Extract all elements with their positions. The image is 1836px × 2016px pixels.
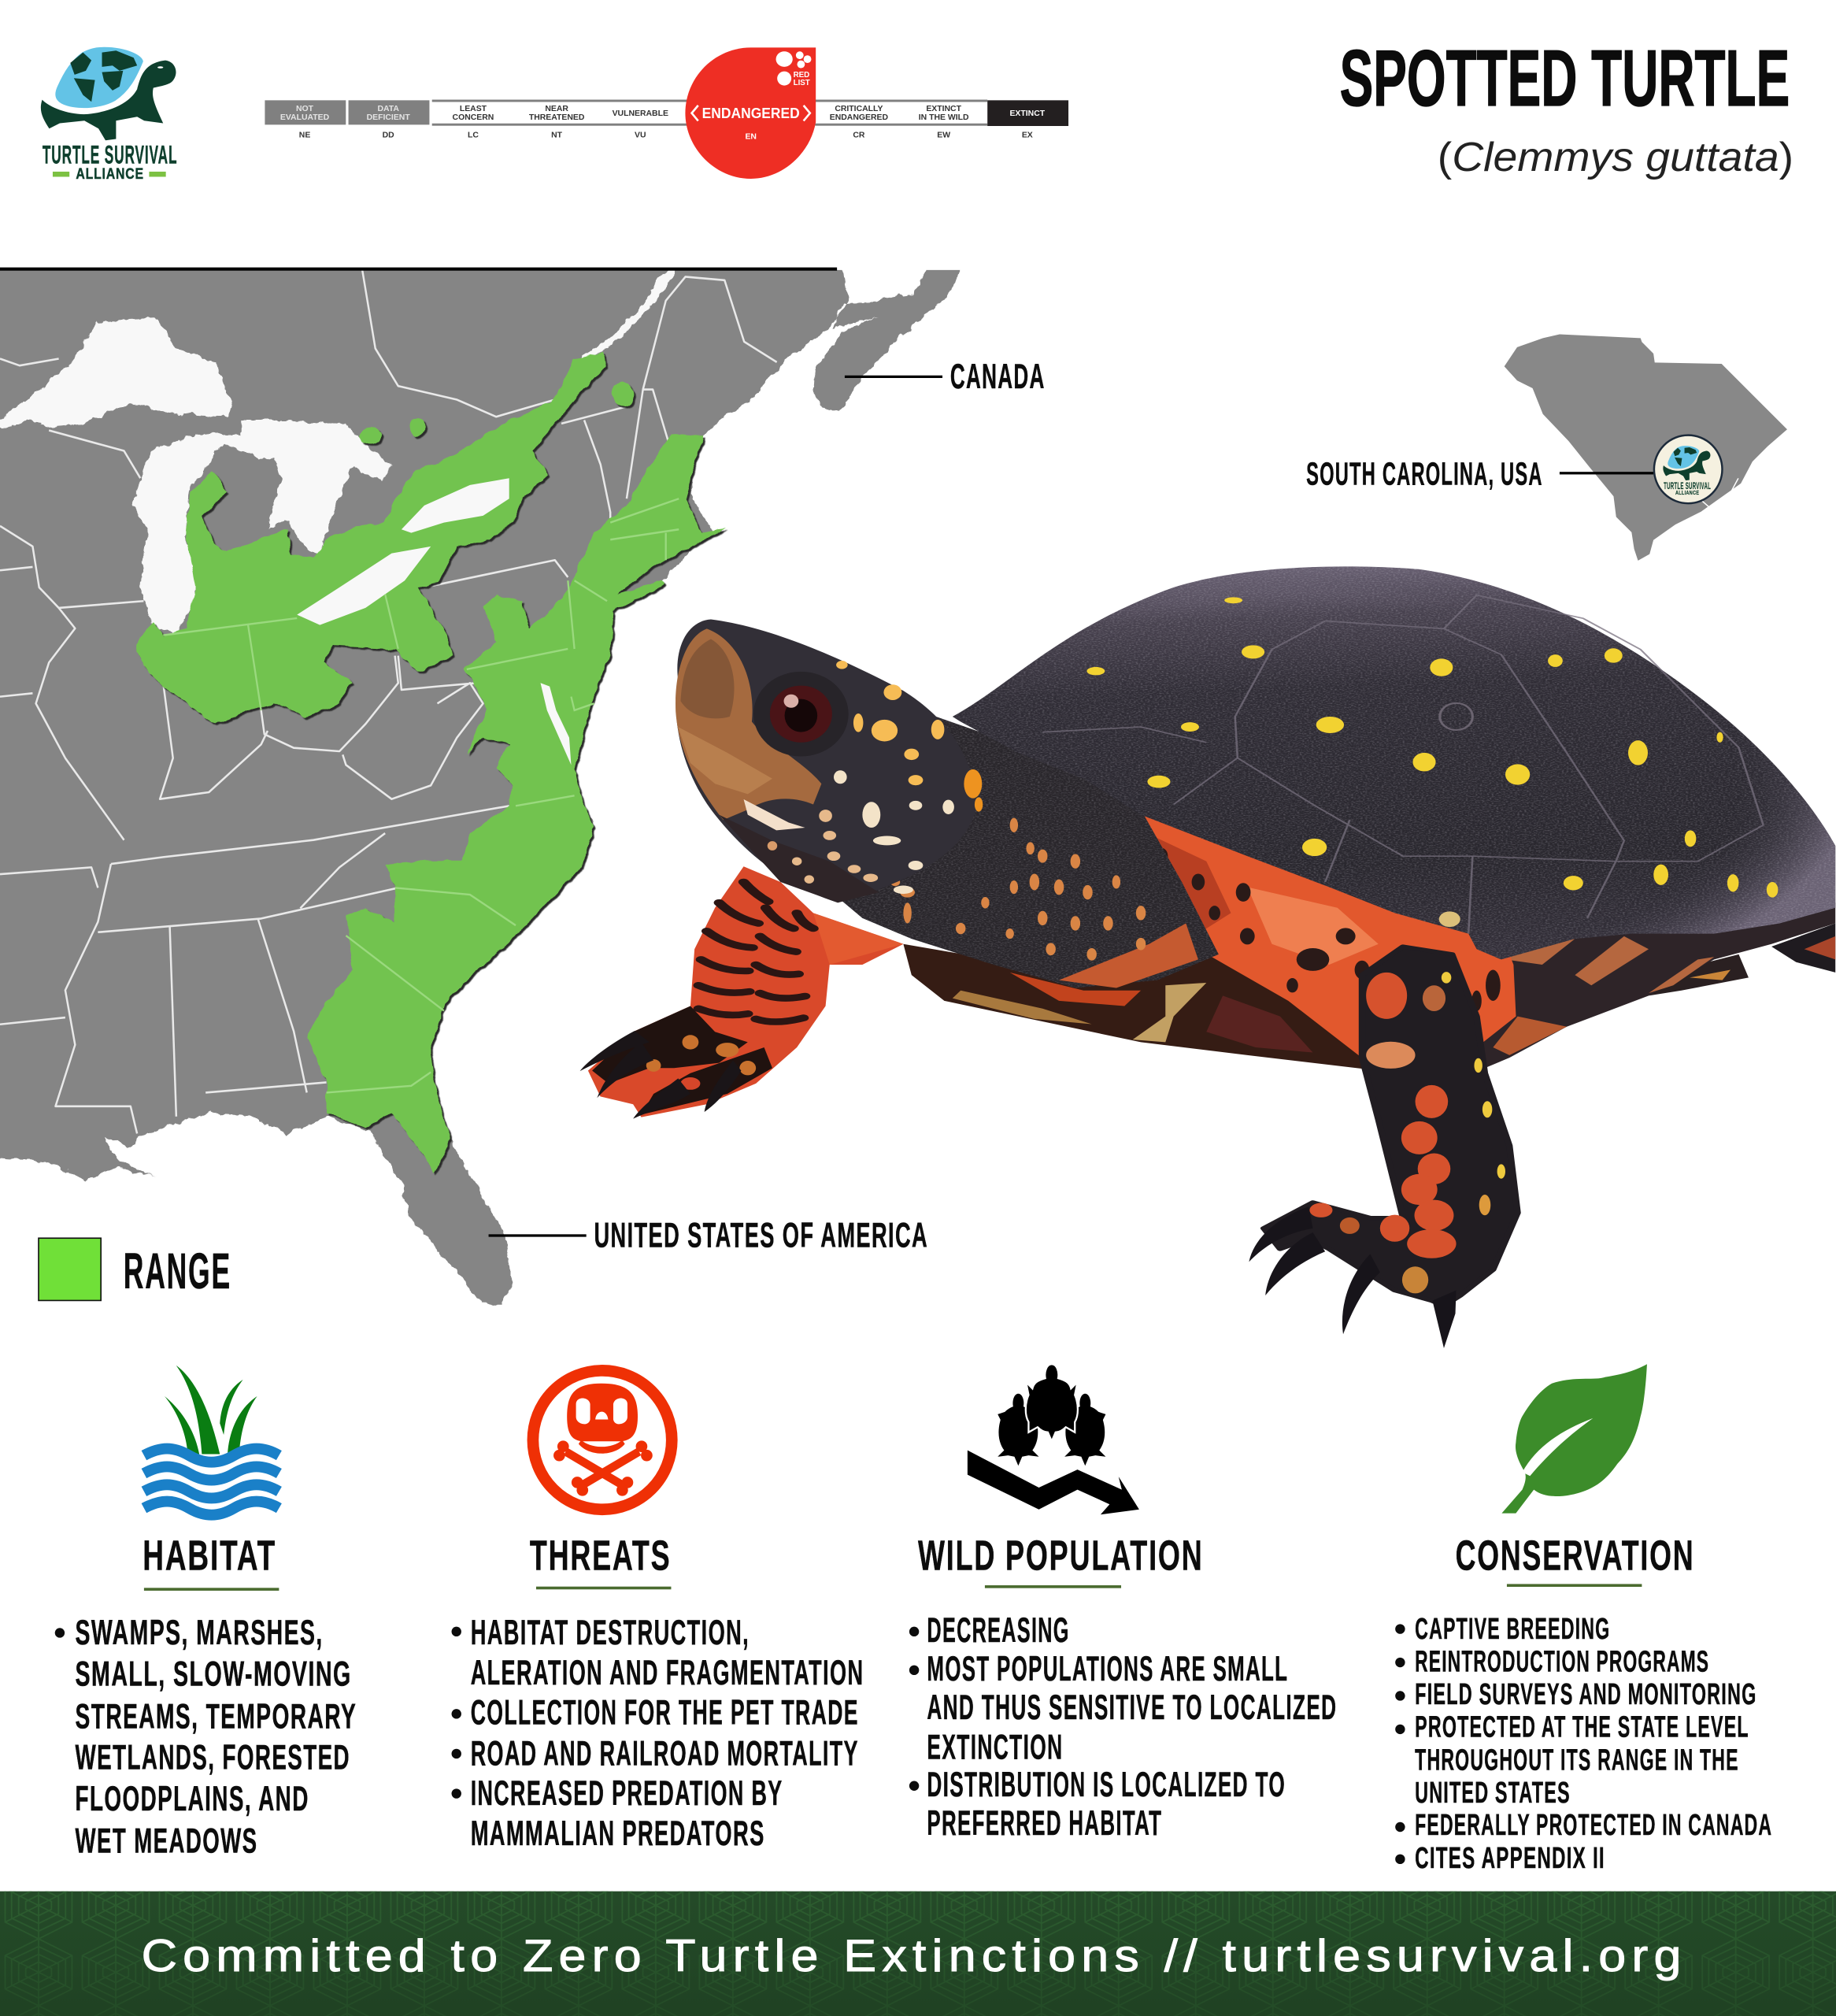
illustration: spotted turtle: [579, 566, 1835, 1348]
left front leg: [579, 866, 903, 1119]
label: Canada: CANADA: [950, 358, 1046, 396]
IUCN red list status bar: NEAR: [545, 105, 568, 113]
IUCN red list status bar: DD: [383, 132, 394, 140]
panel: wild population: [909, 1364, 1337, 1843]
head: [676, 620, 983, 902]
list: habitat: WETLANDS, FORESTED: [76, 1739, 350, 1777]
list: threats: [452, 1614, 864, 1853]
logo: Turtle Survival Alliance: ALLIANCE: [76, 165, 144, 183]
IUCN red list status bar: EXTINCT: [926, 105, 962, 113]
IUCN red list status bar: CRITICALLY: [835, 105, 883, 113]
St Lawrence river and Great Lakes: [0, 270, 676, 636]
icon: turtles and declining arrow: [968, 1364, 1139, 1514]
tail and rear leg: [1649, 923, 1835, 995]
black top rule: [0, 268, 837, 271]
IUCN red list status bar: EVALUATED: [280, 113, 330, 122]
icon: skull and crossbones: [533, 1370, 672, 1510]
IUCN red list status bar: CONCERN: [453, 113, 494, 122]
legend: range: RANGE: [124, 1243, 231, 1299]
IUCN red list status bar: LEAST: [460, 105, 487, 113]
heading: threats: THREATS: [530, 1532, 671, 1579]
IUCN red list status bar: DEFICIENT: [367, 113, 410, 122]
list: wild population: PREFERRED HABITAT: [927, 1804, 1162, 1843]
list: wild population: EXTINCTION: [927, 1728, 1064, 1766]
list: wild population: DECREASING: [927, 1611, 1070, 1650]
list: threats: HABITAT DESTRUCTION,: [471, 1614, 750, 1652]
range borders: [163, 498, 679, 1092]
species range: [135, 352, 724, 1174]
list: conservation: CITES APPENDIX II: [1415, 1841, 1605, 1874]
inset: South Carolina locator: [1306, 334, 1787, 561]
IUCN red list status bar: NT: [551, 132, 563, 140]
icon: grass and water: [144, 1366, 279, 1515]
IUCN red list status bar: RED: [794, 71, 809, 80]
list: threats: MAMMALIAN PREDATORS: [471, 1814, 765, 1853]
icon: leaf: [1501, 1364, 1647, 1514]
list: habitat: FLOODPLAINS, AND: [76, 1780, 309, 1818]
list: wild population: AND THUS SENSITIVE TO LOCALIZED: [927, 1688, 1337, 1727]
IUCN red list status bar: EX: [1022, 132, 1033, 140]
panel: threats: [452, 1370, 864, 1853]
badge: alliance logo: TURTLE SURVIVAL: [1664, 481, 1711, 491]
label: United States of America: [489, 1217, 928, 1255]
list: wild population: [909, 1611, 1337, 1843]
right front leg: [1249, 947, 1518, 1348]
list: wild population: MOST POPULATIONS ARE SMALL: [927, 1650, 1288, 1688]
list: habitat: WET MEADOWS: [76, 1822, 257, 1861]
label: United States of America: UNITED STATES OF AMERICA: [594, 1217, 928, 1255]
list: threats: INCREASED PREDATION BY: [471, 1774, 783, 1813]
scientific name: (Clemmys guttata ): [1438, 135, 1793, 180]
lower shell and bridge: [1452, 902, 1835, 1068]
inset: South Carolina locator: SOUTH CAROLINA, USA: [1306, 456, 1543, 492]
list: habitat: SWAMPS, MARSHES,: [76, 1614, 324, 1652]
plastron: [903, 944, 1379, 1071]
IUCN red list status bar: THREATENED: [529, 113, 585, 122]
IUCN red list status bar: EW: [937, 132, 950, 140]
logo: Turtle Survival Alliance: [41, 46, 177, 183]
list: wild population: DISTRIBUTION IS LOCALIZED TO: [927, 1766, 1286, 1804]
panel: conservation: [1395, 1364, 1772, 1874]
IUCN red list status bar: ENDANGERED: [830, 113, 888, 122]
list: habitat: SMALL, SLOW-MOVING: [76, 1655, 352, 1693]
orange body skin: [1116, 779, 1516, 1068]
shell: [953, 566, 1835, 959]
footer banner: Committed to Zero Turtle Extinctions // turtlesurvival.org: [142, 1931, 1687, 1981]
IUCN red list status bar: CR: [853, 132, 865, 140]
list: conservation: UNITED STATES: [1415, 1776, 1571, 1809]
legend: range: [39, 1238, 231, 1300]
list: conservation: [1395, 1612, 1772, 1874]
badge: alliance logo: ALLIANCE: [1675, 491, 1699, 496]
IUCN red list status bar: NOT: [296, 105, 314, 113]
IUCN red list status bar: DATA: [377, 105, 399, 113]
neck: [838, 717, 1219, 988]
IUCN red list status bar: IN THE WILD: [919, 113, 969, 122]
shell spots: [1086, 597, 1778, 927]
land mass: [0, 246, 972, 1304]
logo: Turtle Survival Alliance: TURTLE SURVIVAL: [43, 139, 177, 169]
panel: habitat: [55, 1366, 357, 1861]
IUCN red list status bar: NE: [299, 132, 310, 140]
IUCN red list status bar: ENDANGERED: [702, 105, 800, 121]
badge: alliance logo: [1654, 435, 1722, 503]
list: conservation: CAPTIVE BREEDING: [1415, 1612, 1610, 1645]
footer banner: [0, 1892, 1836, 2016]
IUCN red list status bar: LIST: [794, 79, 810, 87]
IUCN red list status bar: LC: [468, 132, 479, 140]
IUCN red list status bar: EXTINCT: [1009, 109, 1046, 118]
heading: conservation: CONSERVATION: [1456, 1532, 1694, 1579]
map: eastern North America: [0, 246, 972, 1304]
IUCN red list status bar: VU: [635, 132, 646, 140]
list: habitat: [55, 1614, 357, 1861]
list: threats: ALERATION AND FRAGMENTATION: [471, 1654, 864, 1692]
IUCN red list status bar: VULNERABLE: [613, 109, 668, 118]
list: threats: ROAD AND RAILROAD MORTALITY: [471, 1735, 859, 1773]
list: habitat: STREAMS, TEMPORARY: [76, 1697, 357, 1736]
state and province borders: [0, 270, 777, 1133]
IUCN red list status bar: [265, 47, 1068, 179]
list: threats: COLLECTION FOR THE PET TRADE: [471, 1693, 859, 1732]
IUCN red list status bar: EN: [745, 132, 757, 141]
heading: habitat: HABITAT: [143, 1532, 276, 1579]
label: Canada: [845, 358, 1046, 396]
lakes over range: [297, 478, 571, 765]
heading: wild population: WILD POPULATION: [918, 1532, 1204, 1579]
